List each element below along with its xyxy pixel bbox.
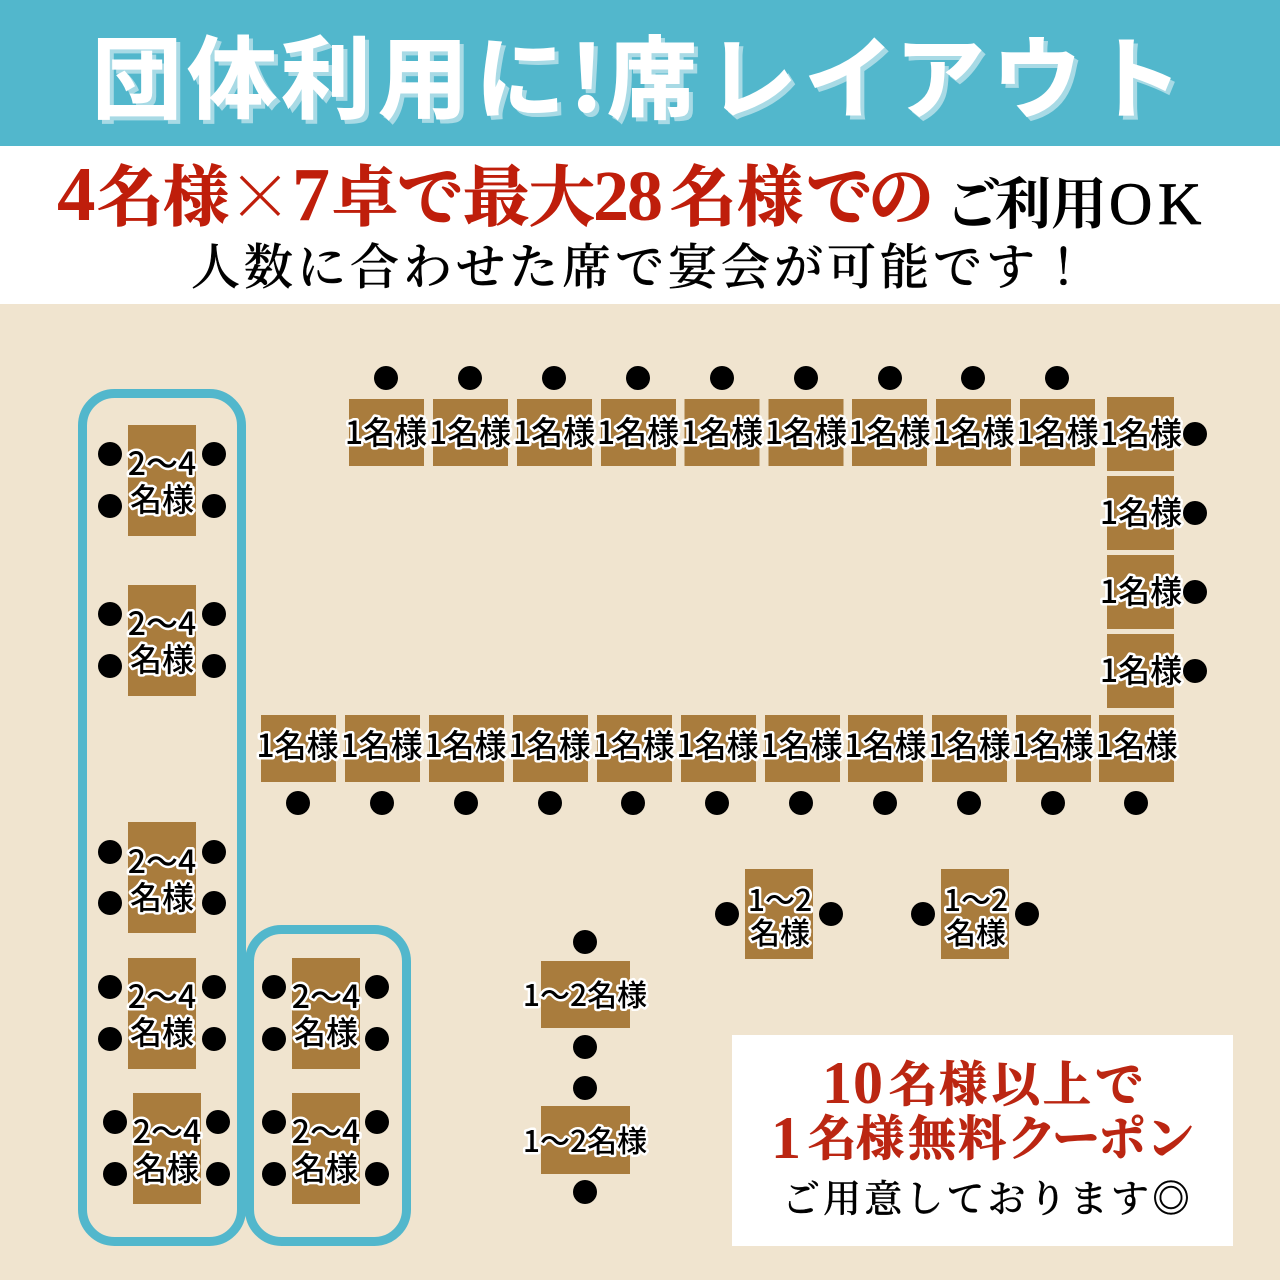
right column of counter seats: 1名様 <box>1100 488 1182 534</box>
panel: subtitle white band <box>0 146 1280 304</box>
table: left group 3: 2〜4 <box>128 837 196 883</box>
subtitle: available note: OK <box>1109 171 1201 237</box>
table: right group 1: 2〜4 <box>292 972 360 1018</box>
table: left group 5 <box>103 1093 230 1204</box>
subtitle: second line: 人数に合わせた席で宴会が可能です！ <box>191 240 1092 295</box>
table: two-seat 4 <box>523 1076 647 1204</box>
table: two-seat 3: 1〜2名様 <box>523 971 647 1015</box>
top row of counter seats: 1名様 <box>1016 408 1099 454</box>
table: right group 2: 2〜4 <box>292 1107 360 1153</box>
table: left group 3: 名様 <box>130 873 194 919</box>
bottom row of counter seats: 1名様 <box>676 721 759 767</box>
subtitle: red capacity headline: 28 <box>593 156 663 236</box>
table: left group 2: 名様 <box>130 635 194 681</box>
table: left group 1: 名様 <box>130 475 194 521</box>
table: two-seat 1: 名様 <box>750 909 810 953</box>
subtitle: red capacity headline: 4 <box>57 151 96 237</box>
table: left group 2 <box>98 585 226 696</box>
table: two-seat 3 <box>523 930 647 1059</box>
top row of counter seats: 1名様 <box>597 408 679 454</box>
table: left group 5: 名様 <box>135 1144 199 1190</box>
bottom row of counter seats: 1名様 <box>424 721 507 767</box>
panel: title teal band <box>0 0 1280 146</box>
callout: coupon <box>732 1035 1233 1246</box>
bottom row of counter seats: 1名様 <box>1011 721 1094 767</box>
subtitle: red capacity headline: 名様での <box>670 162 934 235</box>
subtitle: available note: ご利用 <box>945 175 1107 237</box>
table: right group 2 <box>262 1093 389 1204</box>
table: right group 2: 名様 <box>294 1144 358 1190</box>
bottom row of counter seats: 1名様 <box>592 721 675 767</box>
table: two-seat 2: 1〜2 <box>944 876 1008 920</box>
top row of counter seats: 1名様 <box>429 408 511 454</box>
top row of counter seats: 1名様 <box>681 408 763 454</box>
table: left group 4 <box>98 958 226 1069</box>
table: two-seat 1: 1〜2 <box>748 876 812 920</box>
table: right group 1: 名様 <box>294 1008 358 1054</box>
right column of counter seats: 1名様 <box>1100 409 1182 455</box>
top row of counter seats: 1名様 <box>513 408 595 454</box>
title: 団体利用に!席レイアウト <box>92 7 1182 137</box>
bottom row of counter seats: 1名様 <box>1095 721 1178 767</box>
bottom row of counter seats <box>256 715 1178 815</box>
table: left group 1 <box>98 425 226 536</box>
table: left group 5: 2〜4 <box>133 1107 201 1153</box>
table: two-seat 1 <box>715 869 843 959</box>
subtitle: red capacity headline: 卓で最大 <box>332 162 595 235</box>
bottom row of counter seats: 1名様 <box>256 721 339 767</box>
bottom row of counter seats: 1名様 <box>844 721 927 767</box>
table: left group 3 <box>98 822 226 933</box>
callout: coupon: 名様以上で <box>889 1059 1143 1112</box>
subtitle: red capacity headline: × <box>227 144 293 239</box>
table: left group 2: 2〜4 <box>128 599 196 645</box>
bottom row of counter seats: 1名様 <box>928 721 1011 767</box>
table: two-seat 2 <box>911 869 1039 959</box>
top row of counter seats: 1名様 <box>765 408 847 454</box>
table: left group 4: 2〜4 <box>128 972 196 1018</box>
outline: right teal group <box>250 930 406 1242</box>
table: left group 4: 名様 <box>130 1008 194 1054</box>
subtitle: red capacity headline: 7 <box>292 153 330 237</box>
bottom row of counter seats: 1名様 <box>340 721 423 767</box>
bottom row of counter seats: 1名様 <box>508 721 591 767</box>
callout: coupon: 10 <box>822 1050 883 1116</box>
table: right group 1 <box>262 958 389 1069</box>
subtitle: red capacity headline: 名様 <box>97 162 229 235</box>
callout: coupon: 名様無料クーポン <box>808 1113 1194 1166</box>
top row of counter seats <box>345 366 1099 466</box>
table: two-seat 4: 1〜2名様 <box>523 1117 647 1161</box>
top row of counter seats: 1名様 <box>345 408 427 454</box>
callout: coupon: ご用意しております◎ <box>782 1179 1190 1221</box>
table: two-seat 2: 名様 <box>946 909 1006 953</box>
top row of counter seats: 1名様 <box>848 408 931 454</box>
right column of counter seats: 1名様 <box>1100 646 1182 692</box>
right column of counter seats <box>1100 397 1207 708</box>
outline: left teal group <box>82 394 242 1242</box>
table: left group 1: 2〜4 <box>128 439 196 485</box>
background: beige floor <box>0 304 1280 1280</box>
callout: coupon: 1 <box>771 1105 801 1171</box>
right column of counter seats: 1名様 <box>1100 567 1182 613</box>
bottom row of counter seats: 1名様 <box>760 721 843 767</box>
top row of counter seats: 1名様 <box>932 408 1015 454</box>
